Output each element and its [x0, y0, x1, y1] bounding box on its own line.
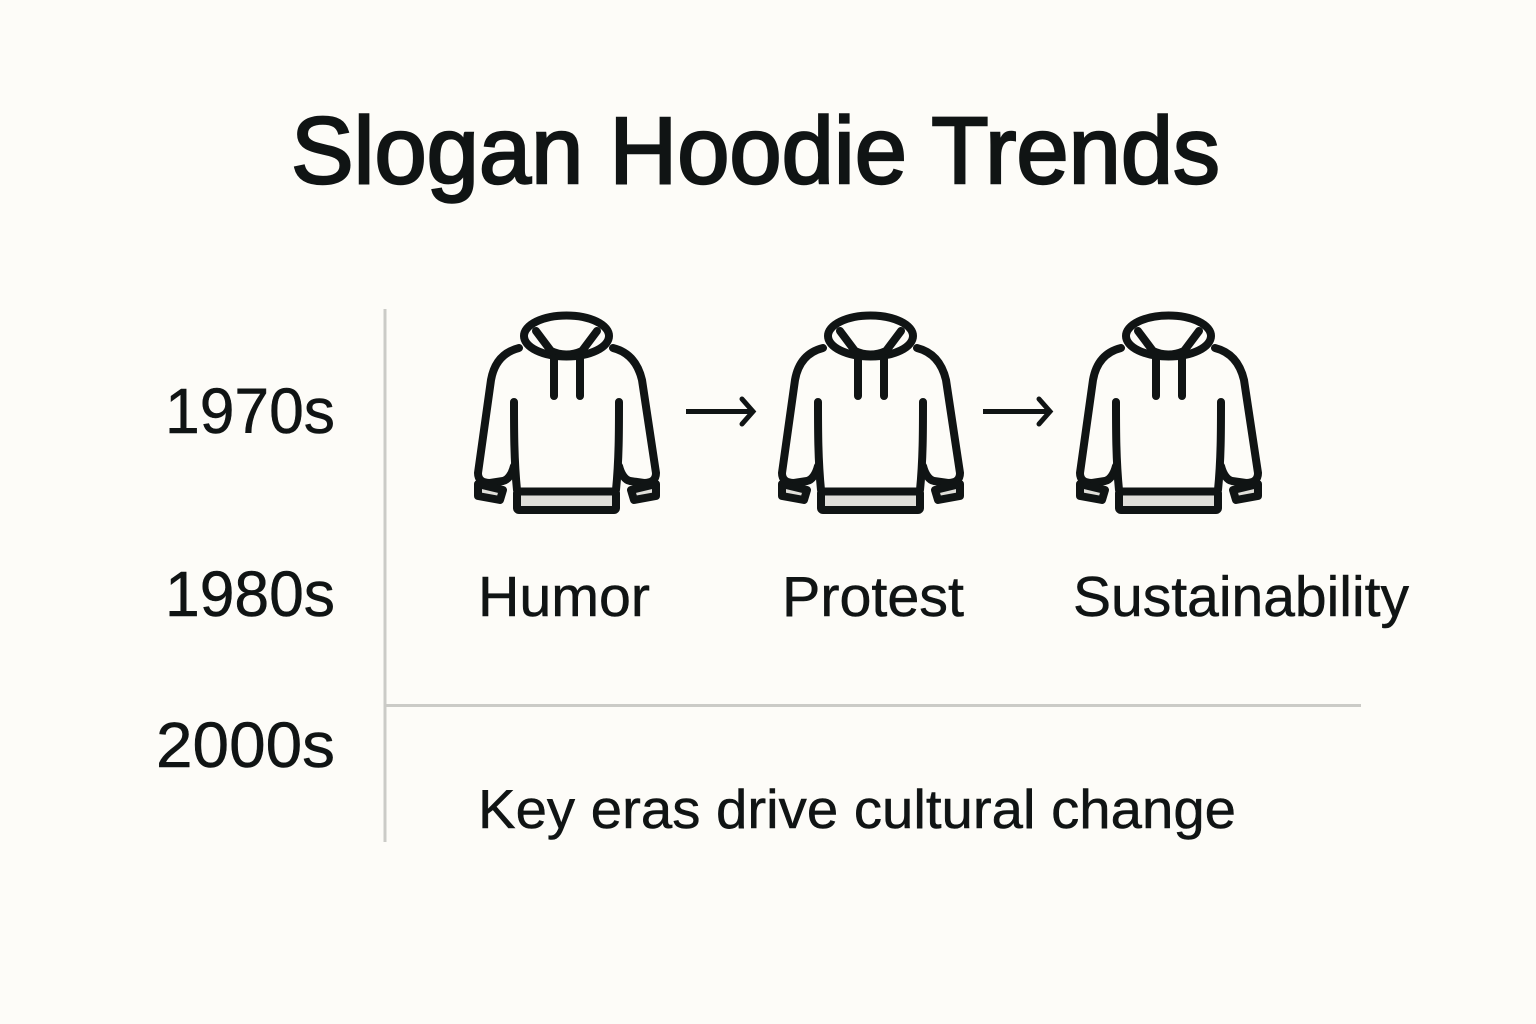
icon: hoodie, sustainability — [1080, 316, 1258, 510]
era label: 2000s: 2000s — [156, 709, 335, 781]
label: Sustainability: Sustainability — [1073, 565, 1409, 629]
label: Humor: Humor — [478, 565, 650, 629]
label: Protest: Protest — [782, 565, 964, 629]
arrow: protest to sustainability — [983, 399, 1050, 424]
era label: 1980s: 1980s — [165, 558, 335, 630]
vertical timeline axis — [384, 309, 386, 842]
era label: 1970s: 1970s — [165, 375, 335, 447]
title: Slogan Hoodie Trends — [291, 98, 1220, 204]
icon: hoodie, protest — [782, 316, 960, 510]
icon: hoodie, humor — [478, 316, 656, 510]
arrow: humor to protest — [686, 399, 753, 424]
caption: Key eras drive cultural change — [478, 778, 1236, 840]
horizontal divider — [385, 704, 1361, 707]
